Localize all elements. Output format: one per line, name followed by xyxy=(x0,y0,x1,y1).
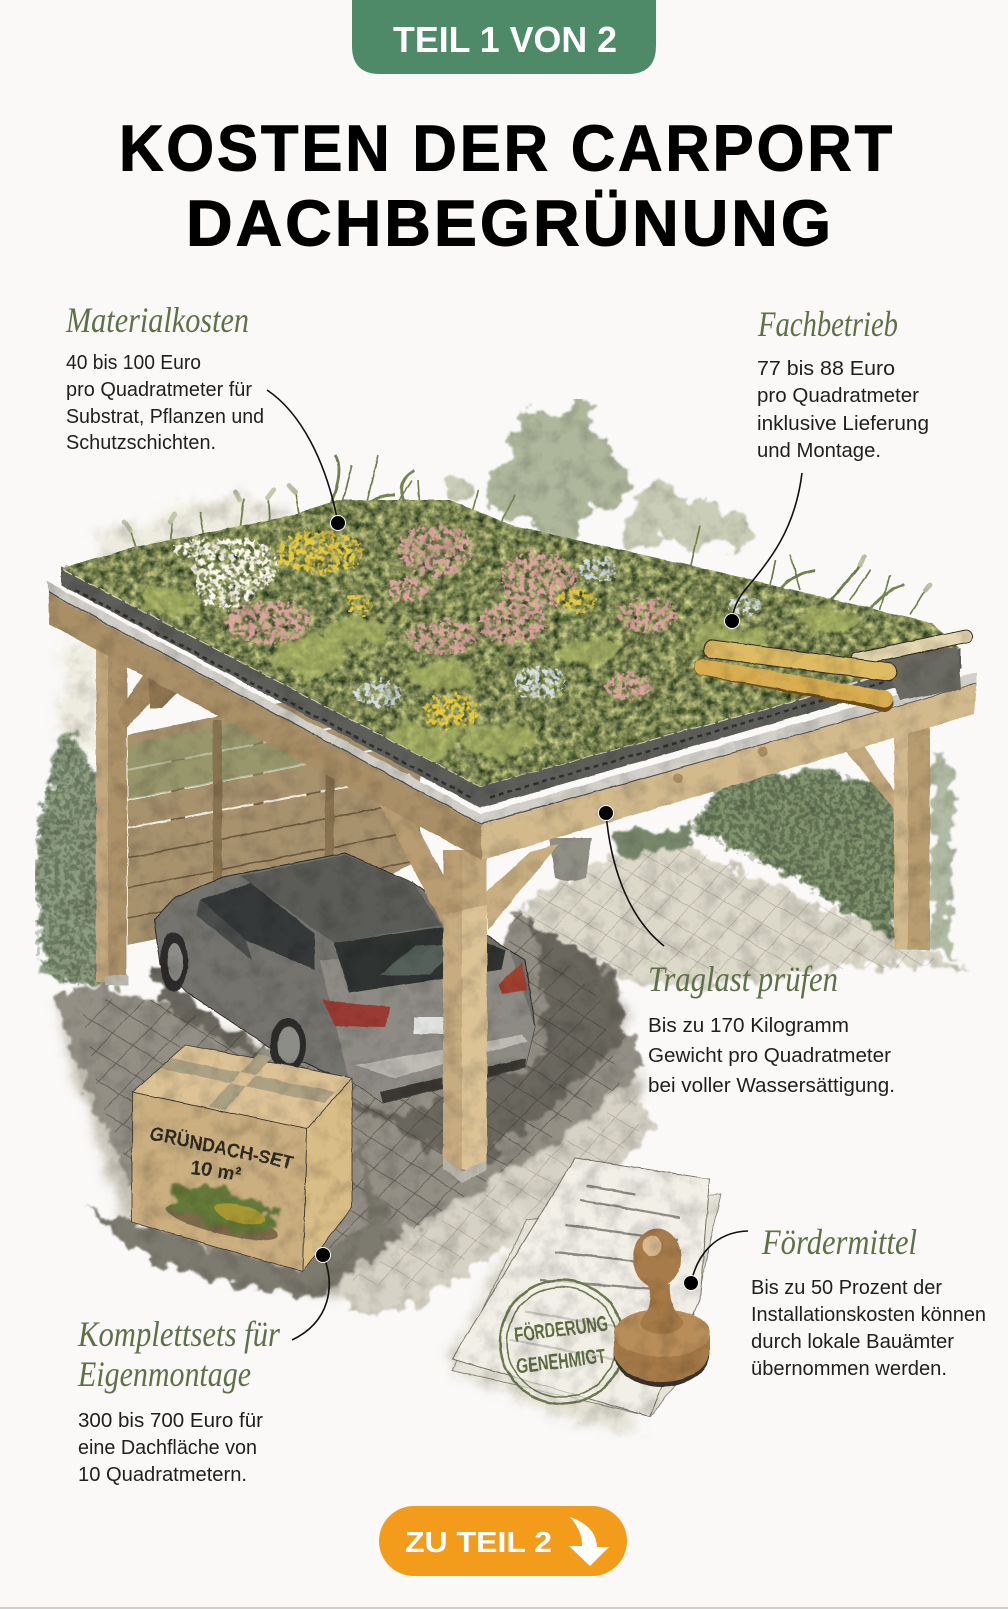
wood knot xyxy=(758,747,768,757)
folding ruler xyxy=(703,636,966,703)
text block: Fachbetrieb xyxy=(757,304,929,462)
icon: curved down arrow xyxy=(569,1517,609,1566)
text block: Fachbetrieb: pro Quadratmeter xyxy=(757,385,919,407)
text block: Materialkosten: 40 bis 100 Euro xyxy=(66,352,201,374)
text block: Fördermittel: Installationskosten können xyxy=(751,1304,986,1326)
text block: Traglast prüfen: Gewicht pro Quadratmeter xyxy=(648,1045,891,1067)
roof plantings back sprigs xyxy=(124,455,930,615)
cardboard box xyxy=(85,1045,400,1300)
right post and brace xyxy=(845,725,930,950)
text block: Fördermittel: übernommen werden. xyxy=(751,1358,947,1380)
planted roof surface xyxy=(61,500,960,786)
approval stamp mark: GENEHMIGT xyxy=(515,1345,607,1378)
leader: Materialkosten xyxy=(267,390,346,530)
text block: Fördermittel: Bis zu 50 Prozent der xyxy=(751,1277,942,1299)
background wash behind roof xyxy=(60,490,300,760)
driveway feather xyxy=(50,985,640,1300)
title: DACHBEGRÜNUNG xyxy=(186,186,834,260)
text block: Fachbetrieb: 77 bis 88 Euro xyxy=(757,358,895,380)
wooden stamp xyxy=(614,1228,710,1387)
approval stamp mark: FÖRDERUNG xyxy=(513,1312,609,1347)
plant pot xyxy=(549,838,592,881)
right hedge xyxy=(610,750,965,960)
text block: Materialkosten: Substrat, Pflanzen und xyxy=(66,406,264,428)
text block: Komplettsets: 10 Quadratmetern. xyxy=(78,1464,247,1486)
left fascia beam xyxy=(48,593,482,860)
leader: Traglast xyxy=(598,806,664,946)
box label: GRÜNDACH-SET xyxy=(148,1123,295,1174)
metal drip edge xyxy=(46,581,977,825)
right fascia beam xyxy=(481,684,977,860)
title xyxy=(119,112,895,260)
leader: Fördermittel xyxy=(684,1231,748,1290)
illustration: green-roof carport scene xyxy=(35,399,977,1440)
text block: Fachbetrieb: inklusive Lieferung xyxy=(757,413,929,435)
text block: Komplettsets xyxy=(77,1314,281,1486)
text block: Komplettsets: Eigenmontage xyxy=(77,1354,251,1394)
text block: Fördermittel xyxy=(751,1222,986,1380)
text block: Materialkosten: pro Quadratmeter für xyxy=(66,379,252,401)
left hedge xyxy=(35,730,115,985)
text block: Traglast prüfen: bei voller Wassersättigung. xyxy=(648,1075,895,1097)
text block: Materialkosten: Materialkosten xyxy=(65,300,249,340)
text block: Traglast prüfen: Traglast prüfen xyxy=(648,959,838,999)
leader: Fachbetrieb xyxy=(724,473,802,628)
leader lines and dots xyxy=(267,390,802,1340)
sunlit driveway pavers xyxy=(340,846,970,1315)
funding documents xyxy=(440,1158,721,1440)
leader: Komplettsets xyxy=(292,1248,330,1340)
approval stamp mark xyxy=(500,1280,624,1404)
text block: Fördermittel: durch lokale Bauämter xyxy=(751,1331,954,1353)
green roof xyxy=(46,455,977,860)
text block: Traglast prüfen: Bis zu 170 Kilogramm xyxy=(648,1015,849,1037)
text block: Fördermittel: Fördermittel xyxy=(761,1222,917,1262)
next-part button: ZU TEIL 2 xyxy=(405,1527,552,1559)
dark driveway pavers xyxy=(55,905,640,1270)
gravel strip xyxy=(61,566,961,808)
title: KOSTEN DER CARPORT xyxy=(119,112,895,184)
front braces xyxy=(379,803,559,930)
bottom edge line xyxy=(0,1607,1008,1609)
next-part button xyxy=(379,1506,627,1576)
box size label: 10 m² xyxy=(189,1157,242,1186)
pebble edge xyxy=(64,567,955,783)
flower and moss patches xyxy=(140,524,860,758)
text block: Traglast prüfen xyxy=(648,959,895,1097)
car xyxy=(154,853,535,1103)
text block: Fachbetrieb: Fachbetrieb xyxy=(757,304,898,344)
left post and brace xyxy=(96,640,185,985)
garden fence xyxy=(128,690,420,945)
front post xyxy=(443,850,487,1183)
text block: Komplettsets: Komplettsets für xyxy=(77,1314,281,1354)
background trees xyxy=(444,399,753,551)
text block: Komplettsets: 300 bis 700 Euro für xyxy=(78,1410,263,1432)
text block: Materialkosten xyxy=(65,300,264,454)
part badge: TEIL 1 VON 2 xyxy=(393,19,617,60)
text block: Komplettsets: eine Dachfläche von xyxy=(78,1437,257,1459)
text block: Materialkosten: Schutzschichten. xyxy=(66,432,216,454)
part badge xyxy=(352,0,656,74)
text block: Fachbetrieb: und Montage. xyxy=(757,440,881,462)
wood knot xyxy=(673,773,683,783)
